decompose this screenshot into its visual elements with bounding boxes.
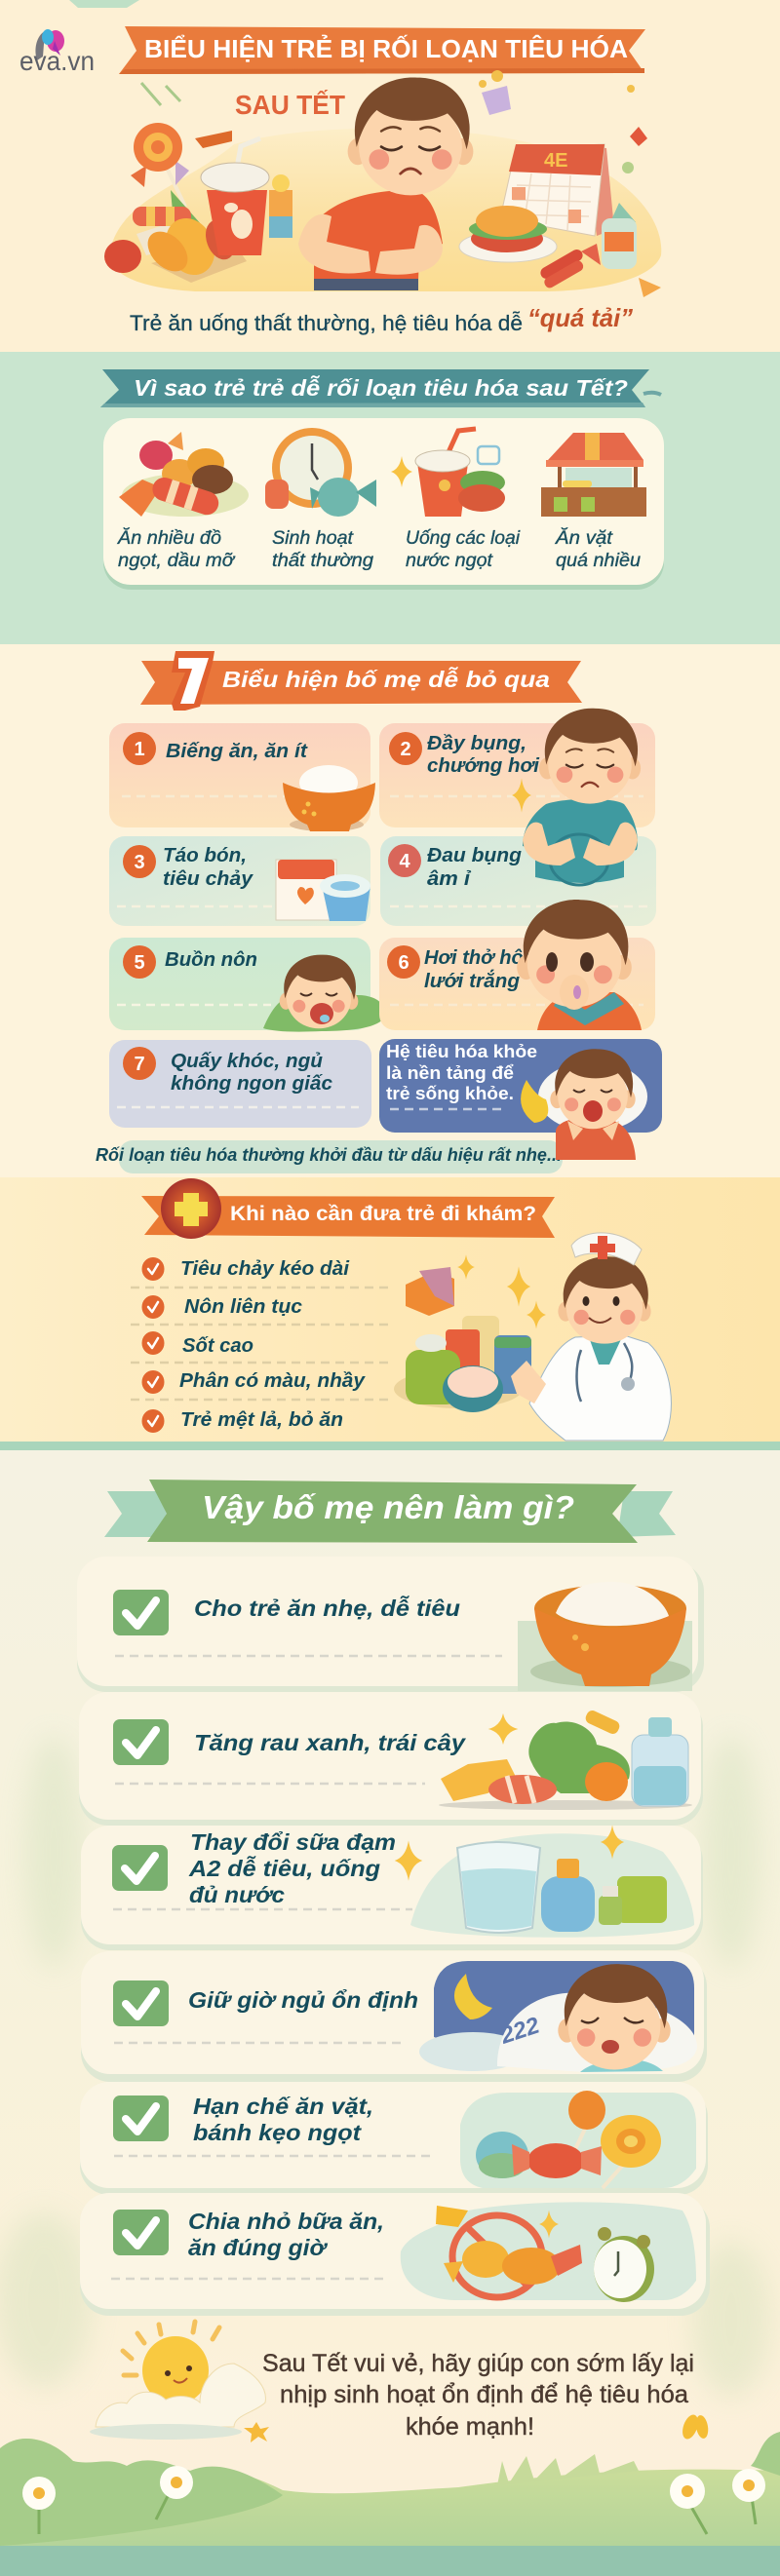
doctor character [511,1233,671,1441]
title ribbon: BIỂU HIỆN TRẺ BỊ RỐI LOẠN TIÊU HÓA [144,34,628,63]
symptom card 2 [379,723,655,827]
symptom card 6: 6 [398,952,410,974]
background: soft green mottling [0,1735,770,2398]
why ribbon: Vì sao trẻ trẻ dễ rối loạn tiêu hóa sau Tết? [134,374,628,401]
background: why section [0,352,780,644]
item: continuous vomiting: Nôn liên tục [184,1296,302,1318]
symptom card 3: tiêu chảy [163,868,254,890]
symptom card 3: Táo bón, [163,845,247,866]
symptoms ribbon: Biểu hiện bố mẹ dễ bỏ qua [222,666,550,692]
icon: sleeping boy at night [419,1961,697,2072]
background: advice section [0,1450,780,2546]
advice card 4: Giữ giờ ngủ ổn định [188,1987,418,2013]
icon: lollipop [131,123,189,207]
boy: yawning with moon and cloud [521,1049,647,1160]
advice card 2 [79,1692,703,1826]
item: high fever [142,1331,254,1357]
flower: far right [732,2469,765,2524]
confetti decorations [141,70,647,173]
tagline: Trẻ ăn uống thất thường, hệ tiêu hóa dễ [130,311,523,335]
icon: rice bowl large [518,1582,692,1691]
caption: soft drinks: Uống các loại [406,527,521,549]
boy: bloated teal shirt [512,709,641,885]
caption: snacks: quá nhiều [556,550,641,571]
icon: water glass milk and bottles [395,1825,694,1938]
symptom card 3: 3 [134,852,145,873]
closing message: khóe mạnh! [406,2413,534,2441]
tagline [130,303,633,335]
advice card 3 [81,1826,703,1950]
checklist: warning signs [131,1257,390,1433]
icon: candies and lollipops [460,2091,696,2188]
caption: soft drinks [406,527,521,571]
illustration: medicine jars and box [394,1254,546,1412]
icon: rice bowl [283,765,375,831]
symptom card 6 [379,938,655,1030]
item: high fever: Sốt cao [182,1335,254,1357]
advice card 6: Chia nhỏ bữa ăn, [188,2209,384,2234]
advice ribbon: Vậy bố mẹ nên làm gì? [202,1489,574,1525]
symptom card 1 [109,723,370,827]
symptom card 4: 4 [399,851,410,872]
meadow landscape [0,2432,780,2546]
symptom card 7: Quấy khóc, ngủ [171,1051,323,1072]
item: abnormal stool: Phân có màu, nhầy [179,1370,366,1392]
logo: eva.vn [20,29,95,76]
symptoms ribbon [140,651,582,711]
symptom card 4 [380,836,656,926]
background: when to see doctor section [0,1177,780,1442]
card: healthy digestion message: là nền tảng để [386,1062,514,1083]
item: continuous vomiting [142,1295,302,1319]
advice card 4 [81,1951,707,2082]
boy: bad breath covering mouth [517,900,642,1030]
flower: left [22,2477,56,2534]
advice card 6 [80,2193,710,2316]
icon: bottle [602,203,661,297]
symptom card 2: chướng hơi [427,755,539,777]
advice card 3: Thay đổi sữa đạm [190,1829,396,1855]
top corner tab [69,0,139,8]
caption: soft drinks: nước ngọt [406,550,494,571]
advice card 3: đủ nước [189,1882,285,1907]
symptom card 4: âm ỉ [427,868,472,890]
background: footer band [0,2546,780,2576]
item: tired child: Trẻ mệt lả, bỏ ăn [180,1409,343,1431]
caption: routine: Sinh hoạt [272,527,355,549]
card: healthy digestion message [379,1039,662,1133]
symptom card 1: Biếng ăn, ăn ít [166,741,308,762]
background: symptoms section [0,644,780,1177]
boy: main holding stomach [298,77,473,290]
icon: sleeping boy at night: 222 [496,2012,543,2050]
symptom card 7: không ngon giấc [171,1073,332,1095]
when to see doctor ribbon: Khi nào cần đưa trẻ đi khám? [230,1202,536,1225]
logo: eva.vn: eva.vn [20,46,95,76]
symptom card 7: 7 [134,1054,145,1075]
icon: no candy and alarm clock [401,2202,696,2302]
icon: drink cup [201,138,292,255]
caption: sweets [117,526,236,571]
icon: calendar and cup [276,860,370,921]
decoration: butterfly [680,2412,710,2441]
caption: routine [272,527,373,571]
advice card 5 [80,2082,708,2195]
advice card 5: bánh kẹo ngọt [193,2120,362,2145]
icon: smiling sun and cloud [90,2322,269,2442]
icon: wrapped candy [538,244,601,289]
closing message [262,2350,694,2441]
heading: sau tết: SAU TẾT [235,90,345,120]
icon: calendar: 4E [544,150,567,172]
icon: food tray [104,190,247,283]
tagline: “quá tải” [527,303,633,332]
card: healthy digestion message: Hệ tiêu hóa khỏe [386,1041,537,1061]
advice card 1 [77,1557,704,1692]
symptom card 4: Đau bụng [427,845,522,866]
icon: vegetables fruit water [439,1709,692,1810]
why ribbon [100,369,661,407]
icon: clock and candy [265,428,376,517]
note band: early signs: Rối loạn tiêu hóa thường khởi đầu từ dấu hiệu rất nhẹ... [96,1144,562,1165]
divider band: teal strip [0,1442,780,1450]
when to see doctor ribbon [141,1196,555,1238]
icon: snack stall [541,433,646,517]
symptom card 5: 5 [134,952,145,974]
symptom card 2: Đầy bụng, [427,733,526,754]
background: hero section [0,0,780,352]
panel: causes [103,418,664,590]
advice card 6: ăn đúng giờ [188,2235,329,2260]
hero illustration: yellow backdrop [109,129,661,291]
caption: sweets: ngọt, dầu mỡ [118,550,236,571]
caption: routine: thất thường [272,550,373,571]
note band: early signs [96,1140,563,1173]
icon: burger plate [459,206,557,262]
icon: soft drink and burger [391,429,505,517]
flower: right [670,2474,707,2534]
icon: calendar [500,144,614,236]
symptom card 3 [109,836,370,926]
advice card 3: A2 dễ tiêu, uống [188,1855,380,1881]
boy: nausea [263,955,385,1032]
title ribbon [119,26,645,74]
symptom card 5: Buồn nôn [165,949,257,971]
icon: medical cross badge [161,1178,221,1239]
symptom card 1: 1 [134,739,145,760]
symptom card 2: 2 [400,739,411,760]
closing message: Sau Tết vui vẻ, hãy giúp con sớm lấy lại [262,2350,694,2377]
caption: sweets: Ăn nhiều đồ [117,526,221,549]
advice ribbon [104,1480,676,1543]
flower: mid left [156,2466,193,2519]
symptom card 6: Hơi thở hôi, [424,947,534,969]
item: prolonged diarrhea: Tiêu chảy kéo dài [180,1258,349,1280]
card: healthy digestion message: trẻ sống khỏe. [386,1083,514,1103]
caption: snacks [555,526,641,571]
caption: snacks: Ăn vặt [555,526,614,549]
symptom card 6: lưới trắng [424,970,520,992]
symptom card 5 [109,938,370,1030]
advice card 5: Hạn chế ăn vặt, [193,2094,373,2119]
advice card 1: Cho trẻ ăn nhẹ, dễ tiêu [194,1595,460,1621]
symptom card 7 [109,1040,371,1128]
advice card 2: Tăng rau xanh, trái cây [194,1730,466,1755]
icon: sweets and fried food [119,432,249,518]
closing message: nhịp sinh hoạt ổn định để hệ tiêu hóa [280,2381,688,2408]
